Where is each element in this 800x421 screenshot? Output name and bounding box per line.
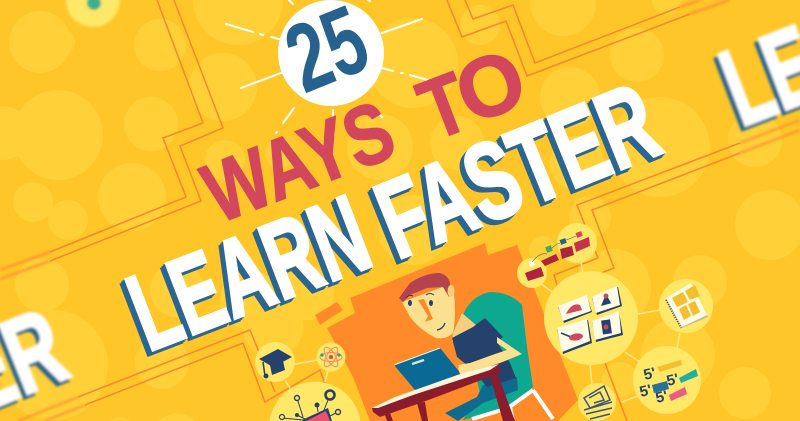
neck — [452, 313, 476, 342]
heading: ways to: T — [406, 54, 482, 159]
heading: learn — [107, 172, 386, 379]
eyes and brows — [408, 300, 433, 306]
icon circle: five-minute tags: 5' — [642, 365, 658, 384]
laptop — [394, 348, 462, 390]
face — [402, 285, 455, 338]
icon: atom — [316, 342, 346, 372]
desk — [372, 364, 515, 421]
blurred bubble: top green spot — [66, 0, 120, 27]
connectors between icon circles — [285, 262, 680, 402]
shirt — [452, 318, 516, 387]
orange backdrop panel — [327, 243, 578, 421]
hand — [458, 364, 468, 374]
heading: learn: LEARN — [108, 177, 381, 379]
card: pan — [557, 319, 592, 354]
icon circle: letter blocks 2 — [532, 223, 597, 266]
trousers — [445, 377, 518, 421]
chair — [462, 292, 553, 420]
heading: ways to: WAYS — [191, 83, 407, 242]
heading: ways to: O — [443, 31, 538, 143]
blurred repeat of title, left edge — [0, 285, 83, 421]
heading: faster: FASTER — [360, 60, 675, 282]
heading: ways to — [191, 31, 538, 242]
icon: graduation cap — [255, 342, 295, 382]
icon circle: five-minute tags — [633, 346, 701, 414]
icon circle: picture cards — [544, 271, 638, 365]
heading: learn: LEARN — [110, 175, 382, 378]
heading: faster — [354, 60, 676, 287]
orange tab — [315, 302, 343, 325]
heading: learn: LEARN — [111, 173, 384, 376]
person — [399, 273, 522, 387]
arm — [458, 337, 522, 372]
heading: faster: FASTER — [355, 65, 670, 287]
icon circle: five-minute tags: 5' — [665, 371, 681, 390]
sunburst rays — [226, 0, 428, 135]
nose — [418, 299, 433, 322]
ear — [448, 285, 454, 297]
icon circle: letter blocks 1 — [517, 258, 547, 288]
smile — [437, 323, 445, 330]
heading: faster: FASTER — [358, 61, 673, 284]
icon circle: five-minute tags: 5' — [654, 388, 670, 407]
hair — [399, 273, 450, 302]
heading: learn: LEARN — [113, 172, 385, 374]
icon circle: notebook — [659, 279, 713, 333]
icon: circuit chip — [270, 382, 360, 421]
card: metronome — [592, 286, 622, 315]
card: can — [592, 311, 623, 342]
icon circle: maze — [578, 383, 616, 421]
card: hat — [558, 295, 592, 323]
icon circle: five-minute tags: 5' — [638, 382, 654, 401]
heading: faster: FASTER — [357, 63, 672, 286]
